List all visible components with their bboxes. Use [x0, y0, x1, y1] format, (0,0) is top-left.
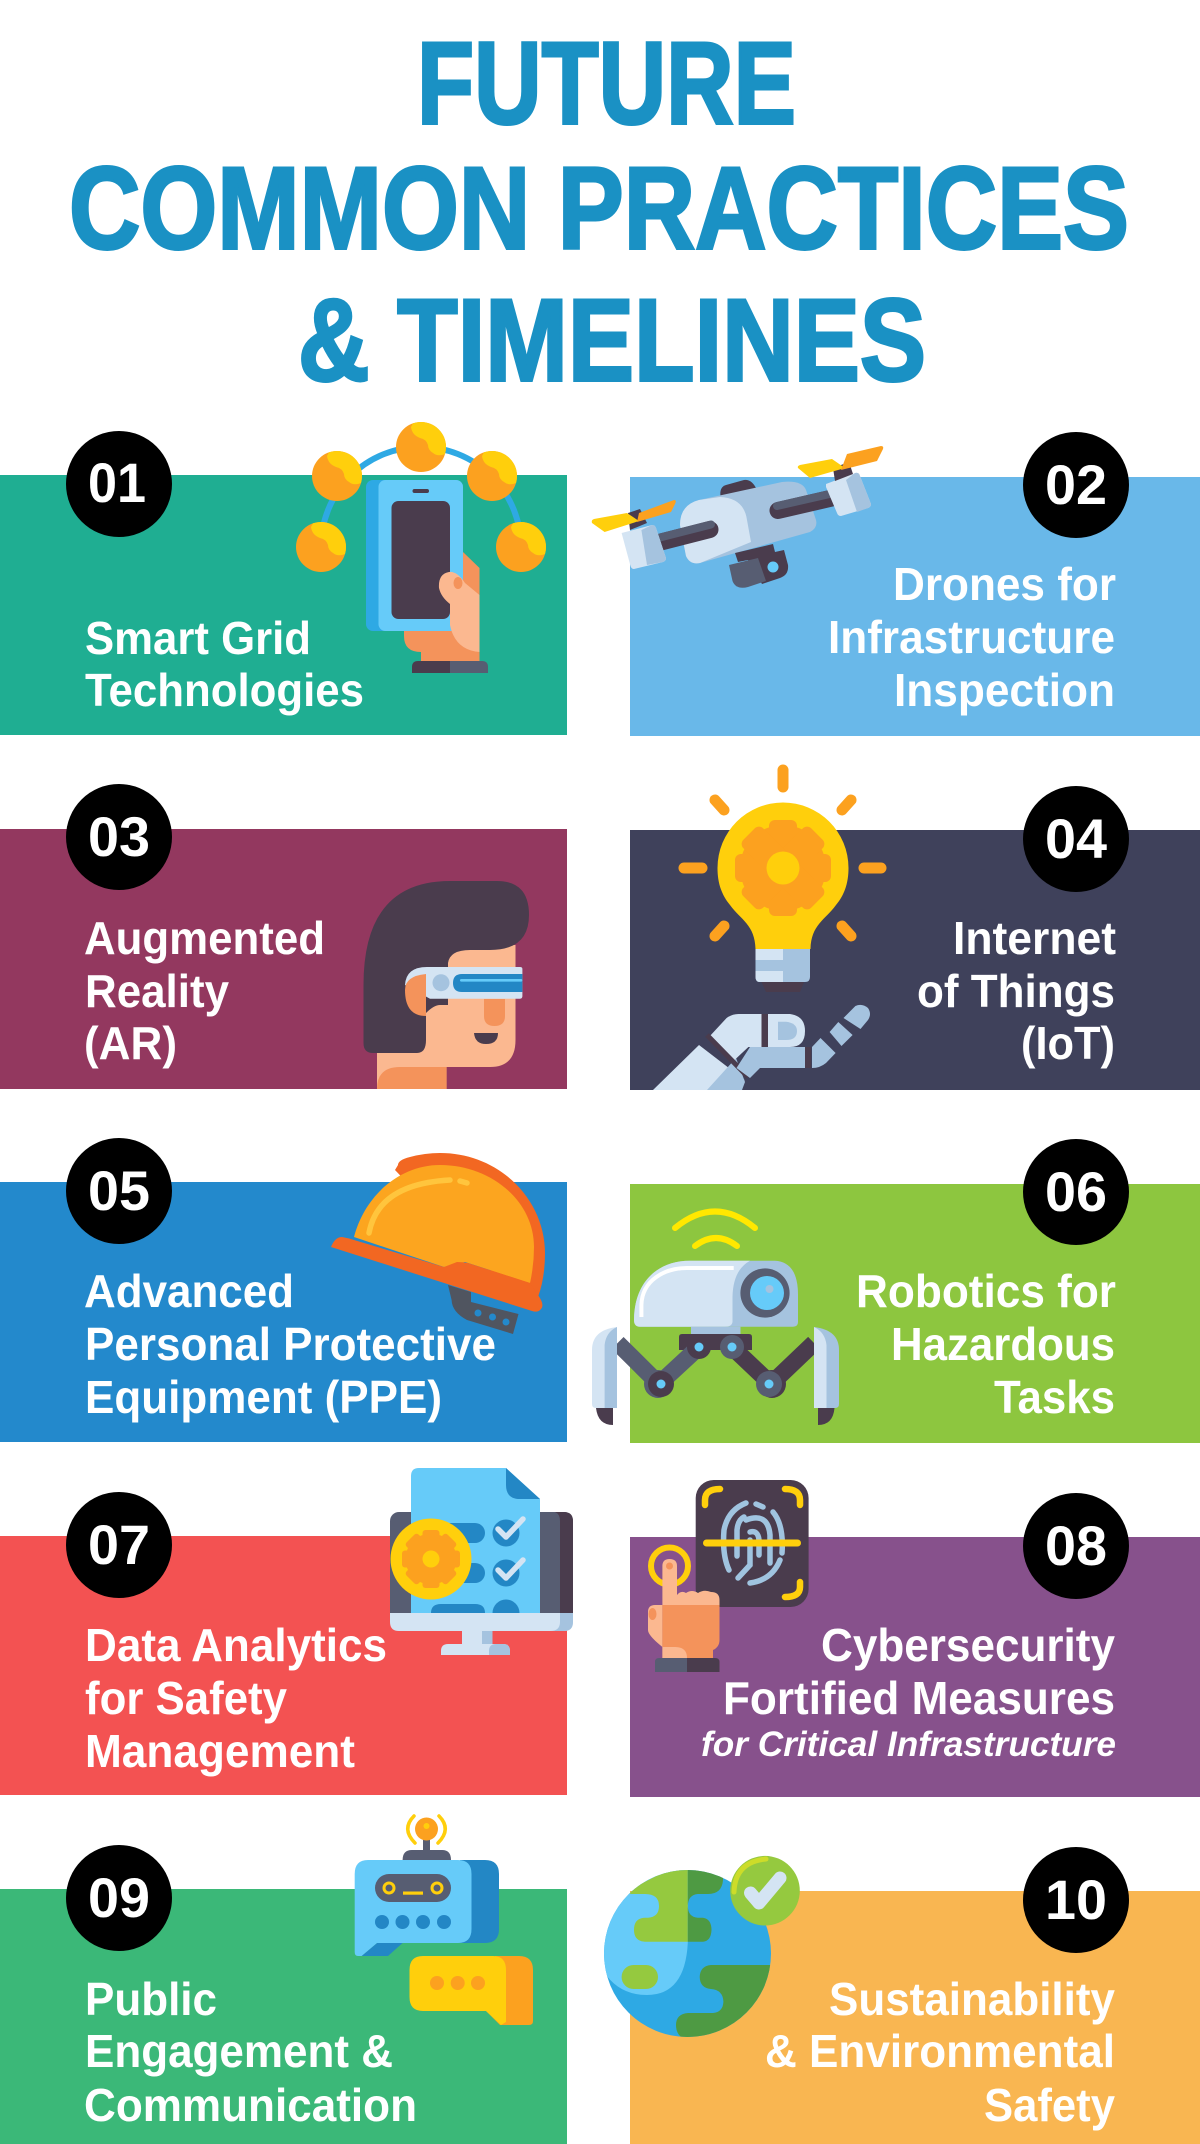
number badge 05 — [66, 1138, 172, 1244]
label: advanced personal protective equipment (PPE): Advanced — [84, 1265, 294, 1317]
number badge 06: 06 — [1045, 1160, 1107, 1223]
number badge 03: 03 — [88, 805, 150, 868]
label: augmented reality (AR): (AR) — [84, 1017, 177, 1069]
panel: 03 augmented reality — [0, 784, 567, 1089]
label: drones for infrastructure inspection: Inspection — [894, 664, 1115, 716]
panel: 04 internet of things — [630, 770, 1200, 1090]
panel: 05 advanced personal protective equipment — [0, 1138, 567, 1442]
panel: 06 robotics for hazardous tasks — [592, 1139, 1200, 1443]
panel: 02 drones for infrastructure inspection — [592, 432, 1200, 736]
label: advanced personal protective equipment (PPE) — [84, 1265, 496, 1423]
icon: hard hat — [331, 1153, 545, 1334]
label: internet of things (IoT): Internet — [953, 912, 1116, 964]
number badge 07 — [66, 1492, 172, 1598]
number badge 09: 09 — [88, 1866, 150, 1929]
title: FUTURE — [417, 18, 796, 148]
title: & TIMELINES — [298, 274, 926, 406]
label: data analytics for safety management: for Safety — [85, 1672, 287, 1724]
label: public engagement and communication: Public — [85, 1973, 217, 2025]
number badge 08 — [1023, 1493, 1129, 1599]
label: internet of things (IoT): of Things — [917, 965, 1115, 1017]
label: advanced personal protective equipment (PPE): Personal Protective — [85, 1318, 496, 1370]
icon: robot chat bubbles — [355, 1816, 533, 2025]
label: public engagement and communication — [84, 1973, 417, 2131]
number badge 03 — [66, 784, 172, 890]
label: cybersecurity fortified measures for critical infrastructure: for Critical Infrastructure — [701, 1725, 1116, 1764]
icon: person wearing AR glasses — [364, 881, 529, 1089]
label: robotics for hazardous tasks: Tasks — [994, 1371, 1115, 1423]
label: cybersecurity fortified measures for critical infrastructure: Cybersecurity — [821, 1619, 1115, 1671]
number badge 06 — [1023, 1139, 1129, 1245]
title — [69, 18, 1129, 406]
icon: fingerprint scanner and hand — [648, 1480, 809, 1672]
icon: monitor with checklist and gear — [390, 1468, 573, 1655]
number badge 10: 10 — [1045, 1868, 1107, 1931]
number badge 02: 02 — [1045, 453, 1107, 516]
label: sustainability and environmental safety: Sustainability — [829, 1973, 1115, 2025]
label: drones for infrastructure inspection: Drones for — [893, 558, 1116, 610]
number badge 04: 04 — [1045, 807, 1107, 870]
number badge 07: 07 — [88, 1513, 150, 1576]
number badge 05: 05 — [88, 1159, 150, 1222]
icon: phone with network nodes — [296, 422, 546, 673]
label: robotics for hazardous tasks: Hazardous — [891, 1318, 1115, 1370]
icon: robot — [592, 1212, 839, 1425]
label: smart grid technologies: Technologies — [85, 664, 364, 716]
number badge 08: 08 — [1045, 1514, 1107, 1577]
number badge 01 — [66, 431, 172, 537]
panel: 07 data analytics for safety management — [0, 1468, 573, 1795]
label: sustainability and environmental safety: & Environmental — [765, 2025, 1115, 2077]
panel: 08 cybersecurity fortified measures — [630, 1480, 1200, 1797]
label: data analytics for safety management: Data Analytics — [85, 1619, 387, 1671]
label: public engagement and communication: Communication — [84, 2079, 417, 2131]
label: robotics for hazardous tasks: Robotics for — [856, 1265, 1116, 1317]
label: sustainability and environmental safety — [765, 1973, 1115, 2131]
panel: 10 sustainability and environmental safety — [600, 1847, 1200, 2144]
label: cybersecurity fortified measures for critical infrastructure — [701, 1619, 1116, 1764]
label: public engagement and communication: Engagement & — [85, 2025, 393, 2077]
label: internet of things (IoT): (IoT) — [1021, 1017, 1115, 1069]
label: augmented reality (AR) — [84, 912, 325, 1069]
icon: light bulb and robot hand — [653, 770, 881, 1090]
number badge 01: 01 — [88, 451, 146, 514]
label: robotics for hazardous tasks — [856, 1265, 1116, 1423]
icon: drone — [592, 446, 883, 588]
label: augmented reality (AR): Reality — [85, 965, 229, 1017]
panel: 09 public engagement and communication — [0, 1816, 567, 2144]
label: smart grid technologies: Smart Grid — [85, 612, 311, 664]
panel: 01 smart grid technologies — [0, 422, 567, 735]
label: drones for infrastructure inspection — [828, 558, 1116, 716]
label: smart grid technologies — [85, 612, 364, 716]
label: sustainability and environmental safety: Safety — [984, 2079, 1115, 2131]
label: advanced personal protective equipment (PPE): Equipment (PPE) — [85, 1371, 442, 1423]
number badge 10 — [1023, 1847, 1129, 1953]
label: drones for infrastructure inspection: Infrastructure — [828, 611, 1115, 663]
number badge 02 — [1023, 432, 1129, 538]
label: internet of things (IoT) — [917, 912, 1116, 1069]
icon: globe with check badge — [600, 1856, 800, 2041]
label: data analytics for safety management: Management — [85, 1725, 355, 1777]
label: augmented reality (AR): Augmented — [84, 912, 325, 964]
label: cybersecurity fortified measures for critical infrastructure: Fortified Measures — [723, 1672, 1115, 1724]
number badge 04 — [1023, 786, 1129, 892]
number badge 09 — [66, 1845, 172, 1951]
label: data analytics for safety management — [85, 1619, 387, 1777]
